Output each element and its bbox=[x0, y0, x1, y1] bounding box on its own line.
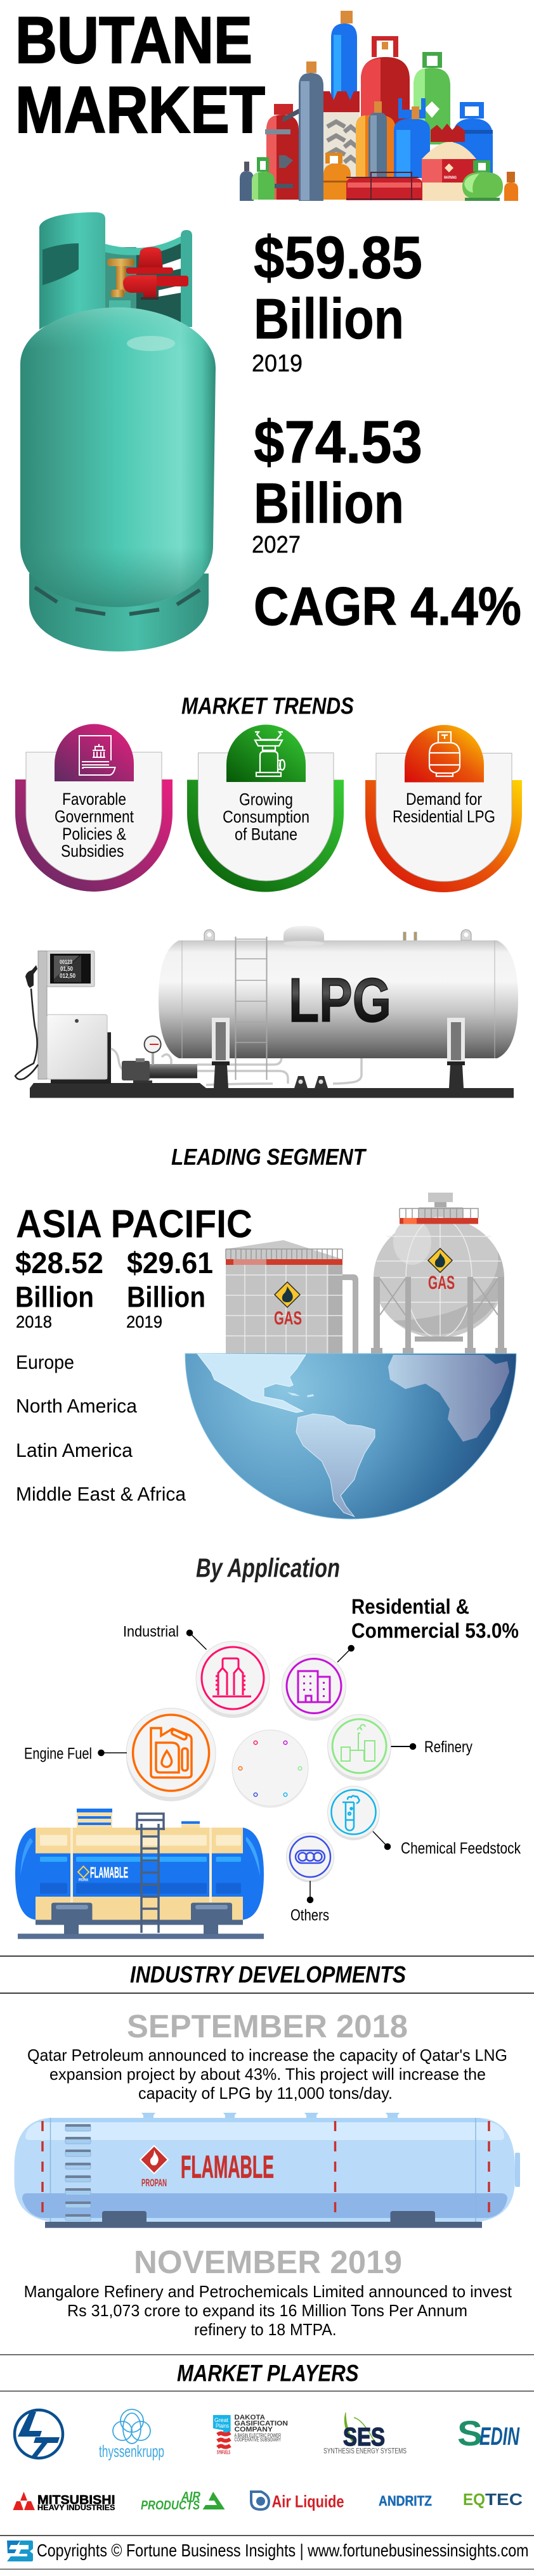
leading region stats: Billion bbox=[127, 1280, 205, 1313]
logo: Air Products bbox=[141, 2490, 225, 2513]
development: november 2019: refinery to 18 MTPA. bbox=[194, 2320, 337, 2339]
illustration: blue flammable tank: FLAMABLE bbox=[90, 1864, 128, 1881]
tank dome bbox=[283, 926, 324, 944]
application labels: Engine Fuel bbox=[24, 1745, 92, 1763]
illustration: blue flammable tank: PROPAN bbox=[79, 1878, 88, 1882]
card text bbox=[393, 790, 495, 826]
logo: thyssenkrupp: thyssenkrupp bbox=[99, 2442, 164, 2461]
card text: Demand for bbox=[406, 790, 482, 809]
title bbox=[15, 4, 265, 147]
leading region stats: $28.52 bbox=[15, 1246, 103, 1279]
segment: residential and commercial bbox=[282, 1654, 346, 1721]
segment: refinery bbox=[328, 1714, 391, 1781]
illustration: group of gas cylinders: WARNING bbox=[444, 176, 457, 180]
illustration: spherical gas tank bbox=[371, 1193, 507, 1354]
development: november 2019: NOVEMBER 2019 bbox=[134, 2244, 402, 2280]
center circle bbox=[232, 1730, 308, 1808]
heading: industry developments: INDUSTRY DEVELOPMENTS bbox=[130, 1962, 406, 1988]
logo: Dakota Gasification Company: A BASIN ELECTRIC POWER bbox=[235, 2433, 281, 2438]
market size 2027 bbox=[252, 409, 422, 558]
panel: trend card favorable government policies bbox=[15, 724, 173, 892]
left collar with handle hole bbox=[39, 212, 105, 330]
logo: Air Products: AIR bbox=[181, 2490, 200, 2504]
illustration: half globe bbox=[185, 1354, 516, 1519]
panel: trend card residential LPG bbox=[365, 725, 522, 892]
logo: Dakota Gasification Company: GASIFICATION bbox=[235, 2420, 288, 2428]
logo: Dakota Gasification Company: SYNFUELS bbox=[217, 2450, 230, 2456]
illustration: spherical gas tank: GAS bbox=[428, 1272, 455, 1293]
segment: chemical feedstock bbox=[327, 1786, 379, 1840]
logo: Air Liquide: Air Liquide bbox=[271, 2492, 344, 2511]
market size 2027: Billion bbox=[254, 472, 404, 535]
cylinder foot ring bbox=[29, 574, 209, 651]
logo: L&T bbox=[15, 2410, 63, 2458]
pump motor bbox=[122, 1058, 197, 1083]
market size 2019: 2019 bbox=[252, 350, 303, 377]
illustration: light blue propane tank: FLAMABLE bbox=[181, 2150, 274, 2185]
logo: Mitsubishi Heavy Industries bbox=[13, 2492, 115, 2512]
pipe wheels bbox=[294, 1076, 328, 1088]
region list: Europe bbox=[16, 1351, 74, 1373]
logo: Dakota Gasification Company: Great bbox=[214, 2417, 228, 2423]
logo: Dakota Gasification Company: COOPERATIVE SUBSIDIARY bbox=[235, 2437, 281, 2443]
title: BUTANE bbox=[15, 4, 252, 77]
application labels: Industrial bbox=[123, 1624, 179, 1640]
development: november 2019 bbox=[24, 2244, 512, 2339]
card text bbox=[223, 790, 309, 844]
leading region stats: 2019 bbox=[126, 1312, 162, 1331]
region list: Latin America bbox=[16, 1439, 133, 1461]
leading region stats: 2018 bbox=[16, 1312, 52, 1331]
tank saddles bbox=[212, 1018, 465, 1088]
leading region stats: Billion bbox=[15, 1280, 94, 1313]
development: november 2019: Mangalore Refinery and Petrochemicals Limited announced to invest bbox=[24, 2282, 512, 2301]
segment: others bbox=[286, 1833, 334, 1883]
logo: Dakota Gasification Company: Plains bbox=[216, 2423, 229, 2429]
logo: Air Products: PRODUCTS bbox=[141, 2499, 200, 2513]
illustration: LPG tank with dispenser bbox=[15, 926, 518, 1098]
application labels: Others bbox=[290, 1907, 329, 1925]
icon: government document bbox=[79, 736, 115, 775]
region list bbox=[16, 1351, 186, 1505]
leading region stats bbox=[15, 1203, 252, 1331]
logo: Andritz: ANDRITZ bbox=[379, 2493, 432, 2509]
card text: Subsidies bbox=[61, 842, 124, 861]
heading: market trends: MARKET TRENDS bbox=[181, 693, 354, 719]
logo: Air Liquide bbox=[251, 2492, 344, 2511]
development: november 2019: Rs 31,073 crore to expand its 16 Million Tons Per Annum bbox=[67, 2301, 467, 2320]
logo: Synthesis Energy Systems: SES bbox=[343, 2423, 385, 2451]
dispenser: 00123 bbox=[60, 959, 72, 965]
leading region stats: ASIA PACIFIC bbox=[16, 1203, 252, 1246]
logo: EQTEC bbox=[463, 2490, 523, 2509]
application labels: Refinery bbox=[424, 1738, 472, 1756]
logo: thyssenkrupp bbox=[99, 2409, 164, 2461]
region list: North America bbox=[16, 1395, 138, 1417]
card text: Growing bbox=[239, 790, 293, 809]
logo: Sedin bbox=[457, 2413, 520, 2453]
illustration: large teal gas cylinder bbox=[20, 212, 216, 651]
application labels bbox=[24, 1594, 521, 1925]
valve bbox=[107, 247, 188, 300]
logo: Dakota Gasification Company: DAKOTA bbox=[235, 2414, 265, 2421]
market size 2027: $74.53 bbox=[254, 409, 422, 476]
title: MARKET bbox=[15, 74, 265, 147]
map: africa bbox=[388, 1355, 509, 1442]
application leader lines bbox=[98, 1630, 416, 1902]
foot ring slots bbox=[35, 587, 200, 614]
logo: Mitsubishi Heavy Industries: HEAVY INDUSTRIES bbox=[37, 2503, 115, 2512]
development: september 2018: Qatar Petroleum announced to increase the capacity of Qatar's LNG bbox=[27, 2046, 507, 2065]
map: south america bbox=[296, 1414, 375, 1516]
cylinder body bbox=[20, 307, 216, 607]
application labels: Residential & bbox=[351, 1594, 469, 1618]
development: september 2018: expansion project by about 43%. This project will increase the bbox=[49, 2065, 486, 2084]
logo: Fortune Business Insights bbox=[7, 2541, 33, 2561]
right collar post bbox=[181, 230, 192, 327]
logo: EQTEC: EQ bbox=[463, 2490, 485, 2509]
dispenser back bbox=[107, 1032, 111, 1083]
icon: gas stove bbox=[255, 732, 285, 776]
illustration: light blue propane tank bbox=[14, 2113, 520, 2228]
illustration: blue flammable tank bbox=[15, 1809, 264, 1939]
illustration: storage tank on globe bbox=[226, 1240, 358, 1354]
development: september 2018: SEPTEMBER 2018 bbox=[127, 2008, 408, 2044]
market size 2019 bbox=[252, 224, 422, 377]
pipes bbox=[111, 1049, 361, 1085]
heading: by application: By Application bbox=[196, 1553, 340, 1582]
heading: leading segment: LEADING SEGMENT bbox=[171, 1144, 367, 1170]
logo: Sedin: S bbox=[457, 2413, 483, 2453]
dispenser: 01,50 bbox=[60, 966, 73, 973]
illustration: storage tank on globe: GAS bbox=[274, 1308, 302, 1329]
card text bbox=[55, 790, 134, 861]
card text: Residential LPG bbox=[393, 807, 495, 826]
logo: Mitsubishi Heavy Industries: MITSUBISHI bbox=[37, 2494, 115, 2508]
heading: market players: MARKET PLAYERS bbox=[177, 2361, 359, 2387]
logo: EQTEC: TEC bbox=[485, 2490, 523, 2509]
market size 2027: 2027 bbox=[252, 532, 301, 558]
card text: Consumption bbox=[223, 807, 309, 826]
application labels: Commercial 53.0% bbox=[351, 1619, 519, 1643]
segment: industrial bbox=[196, 1641, 270, 1718]
illustration: light blue propane tank: PROPAN bbox=[141, 2177, 167, 2189]
map: caribbean islands bbox=[287, 1392, 314, 1397]
application chart: circles bbox=[126, 1641, 391, 1883]
development: september 2018 bbox=[27, 2008, 507, 2103]
dispenser bbox=[15, 951, 107, 1079]
segment: engine fuel bbox=[126, 1708, 216, 1801]
cylinder neck bbox=[109, 300, 131, 309]
illustration: group of gas cylinders bbox=[240, 11, 518, 201]
logo: Synthesis Energy Systems bbox=[323, 2413, 407, 2456]
footer bbox=[0, 2535, 534, 2570]
back of collar bbox=[105, 238, 181, 327]
tank lugs and pins bbox=[204, 930, 471, 940]
tank body bbox=[159, 940, 518, 1058]
card text: Government bbox=[55, 807, 134, 826]
market size 2019: $59.85 bbox=[254, 224, 422, 292]
icon: gas bottle bbox=[429, 732, 460, 776]
region list: Middle East & Africa bbox=[16, 1483, 186, 1505]
card text: Policies & bbox=[62, 824, 126, 843]
LPG label: LPG bbox=[289, 965, 391, 1035]
tank ladder bbox=[236, 937, 266, 1080]
market size 2019: Billion bbox=[254, 288, 404, 351]
logo: Dakota Gasification Company: COMPANY bbox=[235, 2426, 273, 2433]
dispenser: 012,50 bbox=[60, 973, 75, 980]
base platform bbox=[30, 1083, 514, 1098]
card text: of Butane bbox=[235, 825, 297, 844]
pressure gauge bbox=[145, 1036, 161, 1065]
logo: Dakota Gasification Company bbox=[213, 2414, 288, 2456]
leading region stats: $29.61 bbox=[127, 1246, 213, 1279]
card text: Favorable bbox=[62, 790, 126, 809]
logo: Synthesis Energy Systems: SYNTHESIS ENERGY SYSTEMS bbox=[323, 2447, 407, 2456]
panel: trend card growing consumption bbox=[187, 725, 344, 892]
map: north america bbox=[198, 1354, 306, 1413]
development: september 2018: capacity of LPG by 11,000 tons/day. bbox=[138, 2084, 393, 2103]
